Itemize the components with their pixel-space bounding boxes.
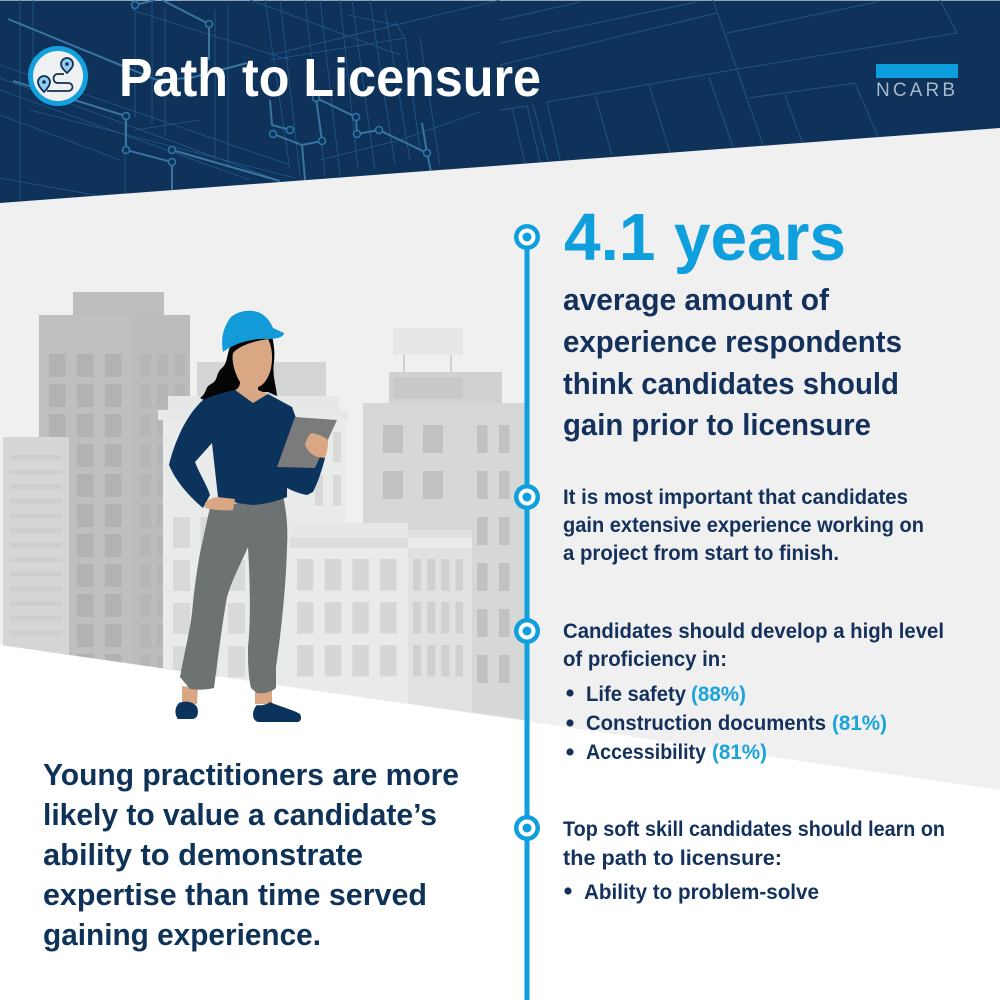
- figure: architect with hard hat and tablet: [169, 311, 337, 722]
- text block: project experience: [563, 486, 924, 565]
- stat description: gain prior to licensure: [563, 407, 871, 442]
- list item: problem solving: Ability to problem-solve: [584, 881, 819, 904]
- left hand on hip: [205, 497, 235, 510]
- timeline node 1: [514, 224, 540, 250]
- stat description: [563, 282, 902, 442]
- building: center tower: [158, 362, 348, 712]
- text block: soft skills: the path to licensure:: [563, 847, 782, 870]
- list item: construction documents: Construction documents: [586, 712, 826, 735]
- text block: project experience: a project from start to finish.: [563, 542, 839, 565]
- building: low left block: [3, 437, 69, 667]
- tablet: [277, 417, 337, 468]
- stat description: think candidates should: [563, 366, 899, 401]
- timeline: [514, 224, 540, 1000]
- ankles: [182, 686, 272, 704]
- building: tall left tower: [39, 292, 190, 671]
- hair: [200, 336, 277, 401]
- text block: young practitioners: ability to demonstrate: [43, 837, 363, 872]
- list item: construction documents: (81%): [832, 712, 887, 735]
- icon: route with map pins: [30, 48, 86, 104]
- header band: [0, 0, 1000, 204]
- stat: 4.1 years: 4.1 years: [564, 200, 846, 275]
- stat description: average amount of: [563, 282, 830, 317]
- text block: soft skills: Top soft skill candidates should learn on: [563, 818, 945, 841]
- text block: project experience: gain extensive experience working on: [563, 514, 924, 537]
- text block: young practitioners: expertise than time served: [43, 877, 427, 912]
- sweater: [169, 390, 325, 508]
- blueprint wireframe: [0, 0, 957, 200]
- building: right tower with billboard: [363, 328, 525, 723]
- text block: project experience: It is most important that candidates: [563, 486, 908, 509]
- list item: life safety: (88%): [691, 683, 746, 706]
- logo: NCARB: [876, 64, 958, 101]
- logo: NCARB: NCARB: [876, 80, 955, 101]
- trousers: [180, 495, 287, 693]
- list item: accessibility: Accessibility: [586, 741, 706, 764]
- list item: life safety: Life safety: [586, 683, 686, 706]
- timeline node 2: [514, 484, 540, 510]
- text block: young practitioners: [43, 757, 459, 952]
- building: front low block: [290, 523, 408, 718]
- text block: proficiency list: [563, 620, 944, 764]
- text block: young practitioners: gaining experience.: [43, 917, 321, 952]
- neck and face: [233, 339, 272, 404]
- shoes: [175, 702, 301, 722]
- text block: soft skills: [563, 818, 945, 904]
- text block: young practitioners: likely to value a candidate’s: [43, 797, 437, 832]
- hard hat: [222, 311, 284, 352]
- list item: accessibility: (81%): [712, 741, 767, 764]
- background panel: [0, 128, 1000, 790]
- text block: proficiency list: of proficiency in:: [563, 648, 727, 671]
- text block: young practitioners: Young practitioners are more: [43, 757, 459, 792]
- text block: proficiency list: Candidates should develop a high level: [563, 620, 944, 643]
- list item: life safety: [566, 683, 746, 706]
- stat description: experience respondents: [563, 324, 902, 359]
- timeline node 4: [514, 815, 540, 841]
- title: Path to Licensure: [119, 48, 541, 108]
- timeline node 3: [514, 618, 540, 644]
- right hand: [305, 433, 328, 458]
- building: narrow front block: [408, 530, 472, 720]
- list item: accessibility: [566, 741, 767, 764]
- city skyline illustration: [3, 292, 525, 723]
